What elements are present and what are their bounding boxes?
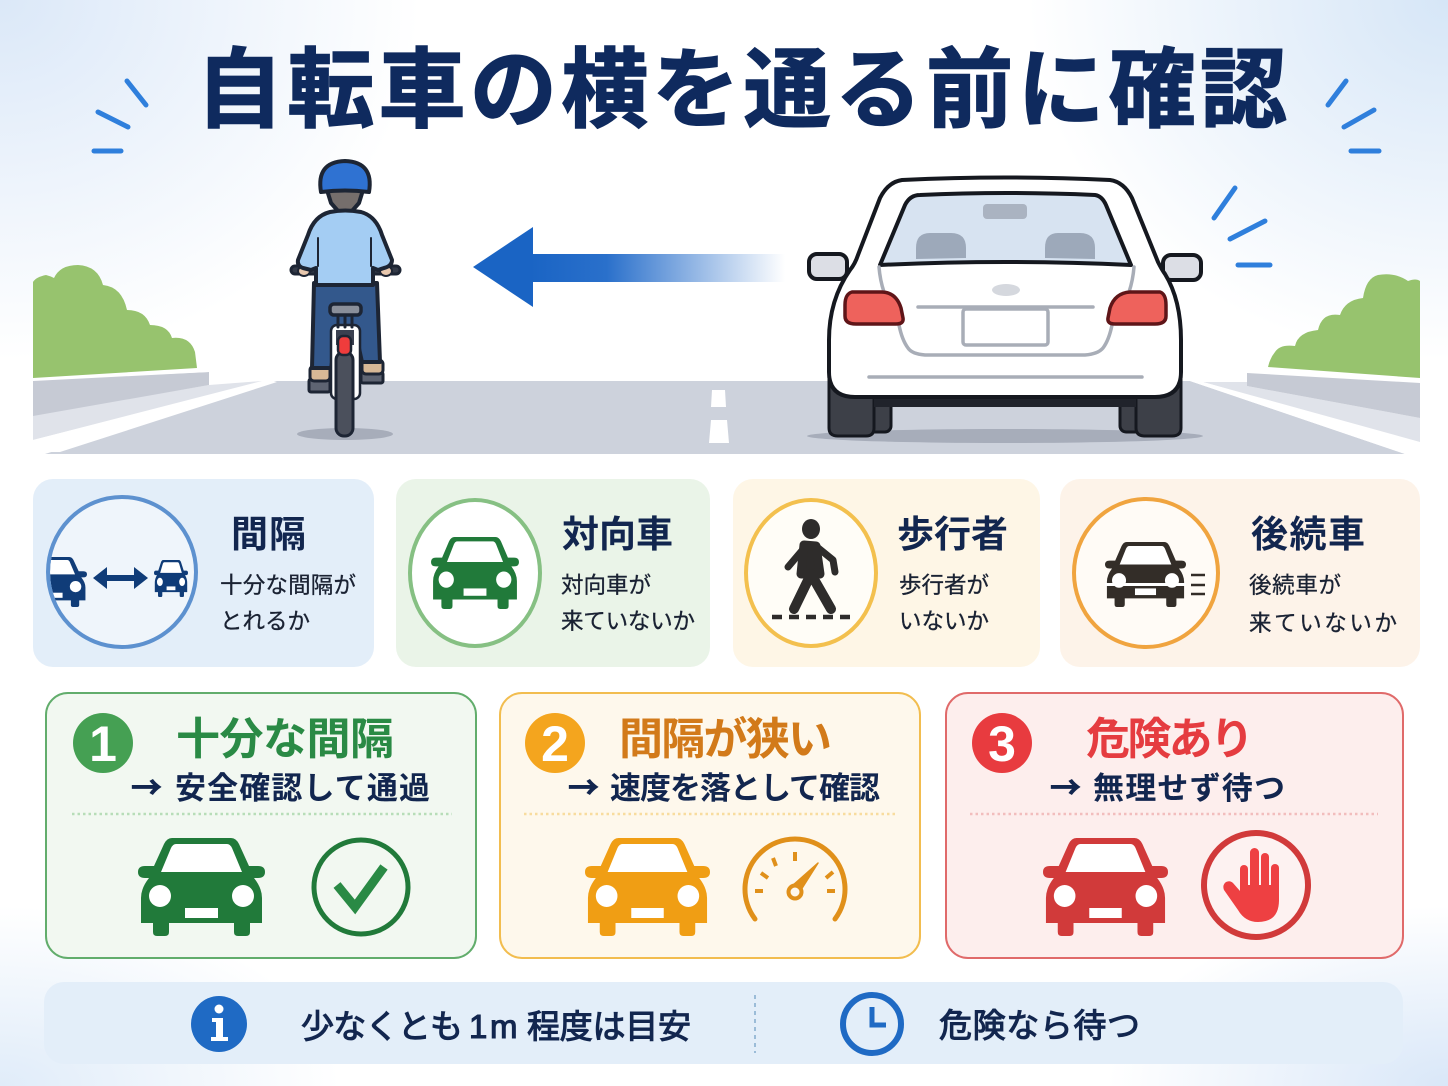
tail lights [845, 292, 1166, 324]
seats [916, 233, 1095, 259]
car rear [807, 178, 1203, 443]
icon: stop hand [1204, 833, 1308, 937]
emphasis lines: car [1214, 188, 1270, 265]
description [1249, 573, 1397, 636]
description: 歩行者が [899, 573, 989, 598]
helmet [320, 161, 370, 192]
head [327, 190, 363, 211]
badge 3 [972, 713, 1032, 773]
heading: 十分な間隔 [176, 715, 394, 764]
heading: 対向車 [562, 514, 673, 555]
panel: 間隔 [21, 479, 374, 667]
icon: check mark [314, 840, 408, 934]
panel: 間隔が狭い [500, 693, 920, 958]
emphasis lines: title right [1328, 81, 1379, 151]
bicycle [330, 304, 361, 436]
road scene [33, 265, 1420, 456]
description: 来ていないか [561, 609, 695, 634]
note: distance: 1 [469, 1008, 487, 1045]
right sidewalk [1190, 373, 1420, 456]
description [561, 573, 695, 634]
right bush [1268, 274, 1420, 378]
icon: two cars with gap [50, 557, 188, 607]
heading: 歩行者 [897, 514, 1008, 555]
badge 2 [525, 713, 585, 773]
description: とれるか [220, 609, 310, 634]
icon: pedestrian [772, 519, 850, 617]
icon: orange car [585, 838, 710, 936]
badge 1 [73, 713, 133, 773]
note: distance: m [490, 1008, 518, 1045]
cyclist [291, 161, 400, 440]
mirrors [809, 254, 1201, 280]
title: 自転車の横を通る前に確認 [196, 42, 1287, 139]
rear window [880, 193, 1131, 265]
action text [131, 763, 430, 808]
legs [312, 283, 380, 368]
torso [298, 210, 392, 285]
icon: green car [138, 838, 265, 936]
badge 3: 3 [988, 716, 1016, 772]
panel: 対向車 [396, 479, 710, 667]
action text: → [131, 763, 162, 808]
panel: 危険あり [946, 693, 1403, 958]
action text: 速度を落として確認 [610, 771, 880, 806]
note: distance: 少なくとも [301, 1008, 463, 1045]
shoes and pedals [309, 360, 383, 392]
left sidewalk [33, 368, 277, 452]
icon: following car [1105, 542, 1205, 607]
description: 対向車が [561, 573, 651, 598]
left bush [33, 265, 197, 378]
heading: 間隔が狭い [619, 715, 832, 764]
action text [1050, 763, 1285, 808]
sleeve lines [318, 238, 371, 266]
description: 来ていないか [1249, 611, 1397, 636]
description [220, 573, 356, 634]
lane dashes [709, 390, 729, 443]
description: いないか [899, 609, 989, 634]
handlebars and hands [291, 266, 400, 276]
description: 後続車が [1249, 573, 1341, 598]
road surface [45, 381, 1405, 454]
heading: 間隔 [231, 514, 306, 555]
action text: → [568, 763, 599, 808]
panel: 歩行者 [733, 479, 1040, 667]
rear-view mirror [983, 204, 1027, 219]
footer bar [44, 982, 1403, 1064]
note: distance: 程度は目安 [527, 1008, 691, 1045]
panel: 後続車 [1060, 479, 1420, 667]
action text [568, 763, 880, 808]
badge 2: 2 [541, 716, 569, 772]
emblem [992, 284, 1020, 296]
description: 十分な間隔が [220, 573, 356, 598]
icon: oncoming car [431, 537, 519, 609]
panel: 十分な間隔 [46, 693, 476, 958]
badge 1: 1 [89, 716, 117, 772]
trunk lines [869, 267, 1142, 377]
emphasis lines: title left [94, 81, 146, 151]
icon: speedometer [745, 839, 845, 919]
icon: info [191, 996, 247, 1052]
wheels [829, 375, 1181, 436]
icon: clock [843, 995, 901, 1053]
icon: red car [1043, 838, 1168, 936]
note: wait: 危険なら待つ [939, 1007, 1140, 1044]
action text: → [1050, 763, 1081, 808]
description [899, 573, 989, 634]
action text: 安全確認して通過 [175, 771, 430, 806]
body [829, 178, 1181, 397]
direction arrow [473, 227, 785, 307]
heading: 危険あり [1086, 715, 1254, 764]
action text: 無理せず待つ [1093, 771, 1285, 806]
heading: 後続車 [1251, 514, 1365, 555]
